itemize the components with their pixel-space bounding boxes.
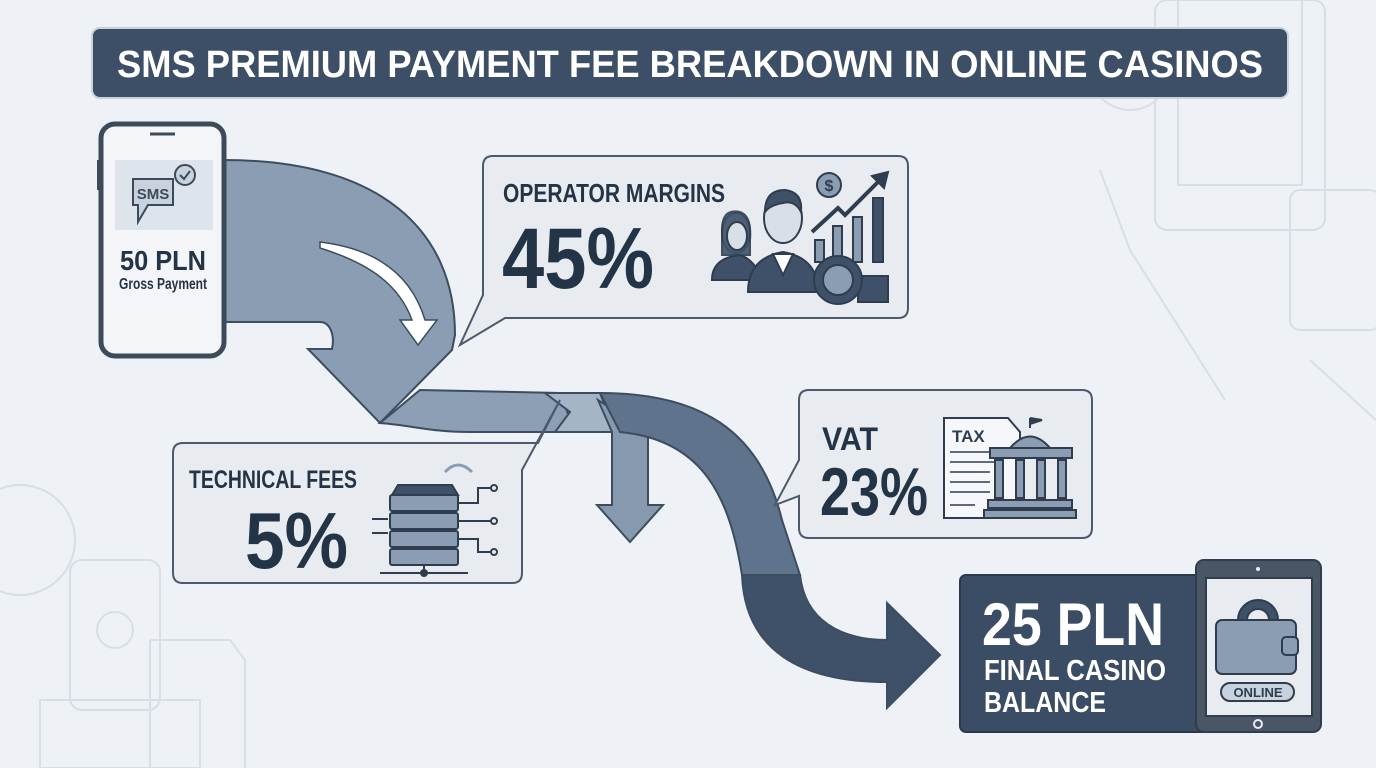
flow band: continuation [380,390,940,708]
panel: operator margins: OPERATOR MARGINS [503,178,725,208]
panel: final casino balance: FINAL CASINO [984,655,1166,687]
phone: gross payment: Gross Payment [119,276,207,293]
panel: technical fees: TECHNICAL FEES [189,466,357,494]
panel: VAT: VAT [822,421,878,457]
panel: final casino balance: BALANCE [984,687,1106,719]
panel: final casino balance [960,560,1321,732]
icon: business people with chart [712,172,888,304]
panel: operator margins [460,156,908,345]
icon: tablet with wallet [1196,560,1321,732]
arrow: final balance [742,575,940,708]
title: SMS PREMIUM PAYMENT FEE BREAKDOWN IN ONLINE CASINOS [117,44,1263,86]
title [92,28,1288,98]
panel: technical fees [173,400,560,585]
icon: tax document and government building [944,418,1076,518]
phone: gross payment [97,124,224,356]
panel: final casino balance: 25 PLN [982,591,1164,658]
icon: business people with chart: $ [825,178,834,195]
panel: technical fees: 5% [245,496,348,585]
arrow: technical fees down [597,400,663,542]
phone: gross payment: 50 PLN [120,245,206,276]
panel: operator margins: 45% [502,211,654,307]
panel: VAT: 23% [820,454,928,530]
panel: VAT [775,390,1092,538]
flow arrow: gross payment to operator margin [224,160,455,423]
icon: server [372,465,497,576]
icon: tax document and government building: TAX [952,427,985,446]
icon: sms bubble: SMS [137,186,169,203]
icon: tablet with wallet: ONLINE [1233,685,1283,700]
icon: sms bubble [133,165,195,222]
